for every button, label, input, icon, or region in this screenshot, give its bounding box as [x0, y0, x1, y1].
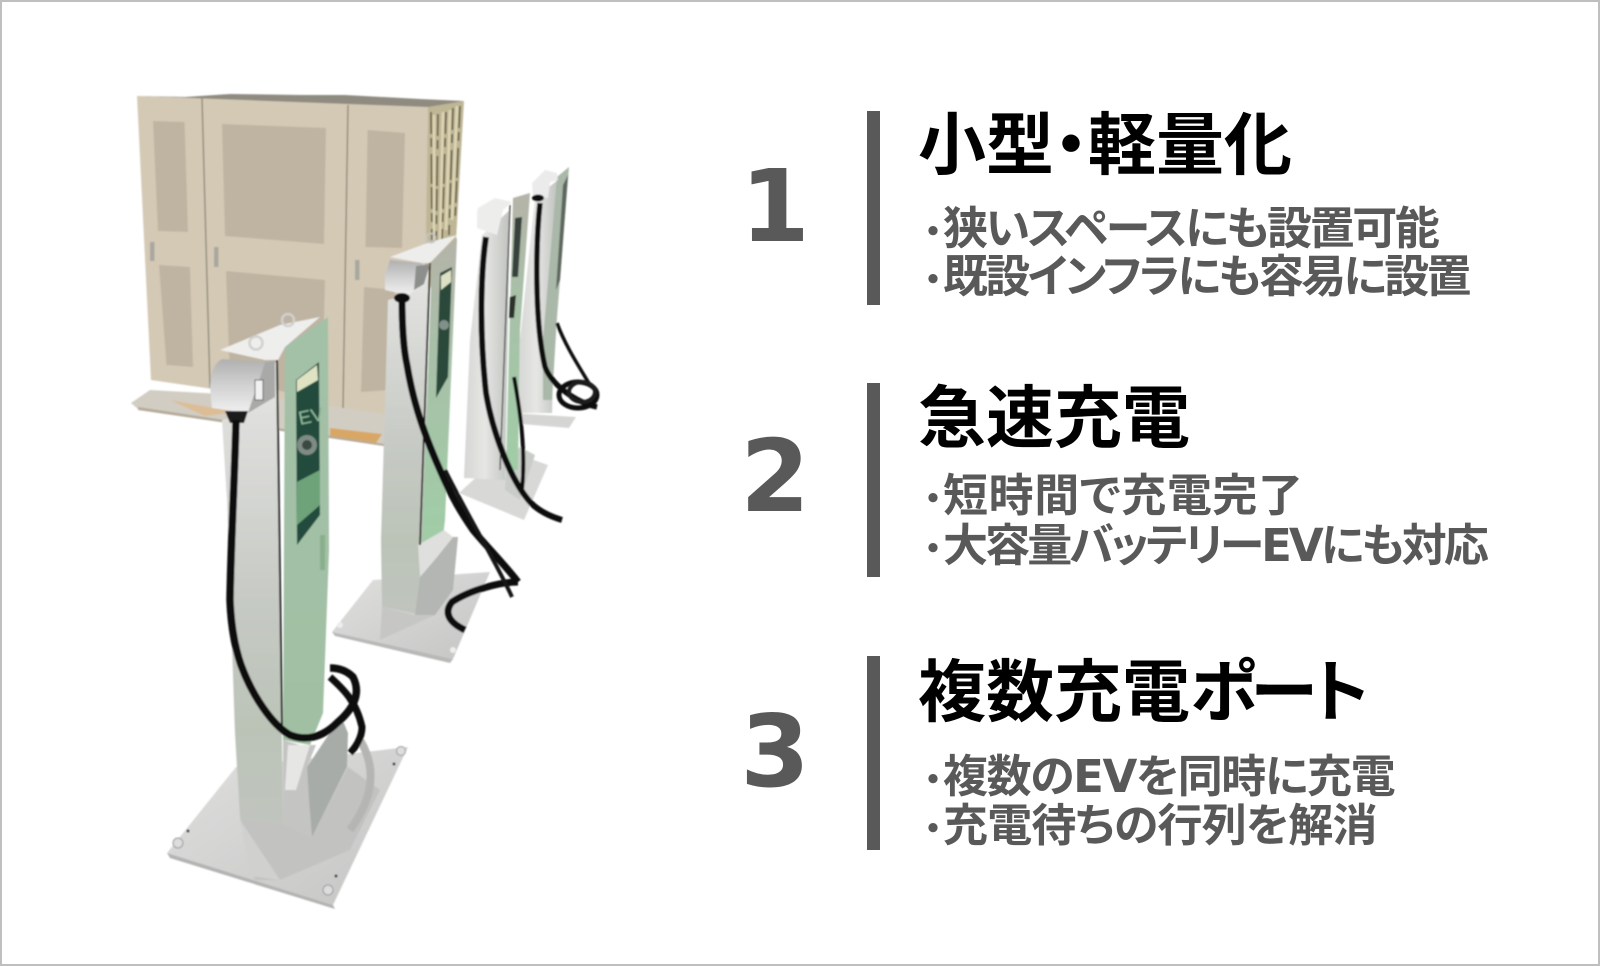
cable [225, 411, 248, 423]
bullet 1-1: ・ [915, 212, 951, 253]
charger post 1 (front) [167, 314, 408, 909]
screen [296, 362, 326, 545]
bullet 3-2: ・ [915, 809, 951, 850]
battery cabinet [137, 94, 464, 420]
section 1: compact and lightweight [740, 90, 1470, 305]
column [222, 360, 283, 823]
section 2: fast charging [740, 363, 1488, 577]
cabinet base plate [131, 390, 420, 446]
number 3: 3 [740, 693, 810, 810]
divider bar 3 [867, 656, 880, 850]
bullet 1-1: 狭いスペースにも設置可能 [943, 202, 1437, 255]
number 1: 1 [740, 148, 810, 265]
divider bar 2 [867, 383, 880, 577]
charger post 2 [332, 234, 518, 663]
divider bar 1 [867, 111, 880, 305]
charger post 4 (rear) [509, 167, 597, 428]
charger post 3 [459, 193, 562, 520]
bullet 1-2: ・ [915, 260, 951, 301]
screen: EV [297, 404, 326, 430]
bullet 2-1: 短時間で充電完了 [943, 469, 1304, 522]
heading 3: 複数充電ポート [918, 637, 1364, 736]
bullet 2-2: ・ [915, 529, 951, 570]
bullet 1-2: 既設インフラにも容易に設置 [943, 250, 1469, 303]
number 2: 2 [740, 418, 810, 535]
bullet 2-1: ・ [915, 479, 951, 520]
front bracket [283, 740, 316, 837]
heading 1: 小型・軽量化 [918, 90, 1292, 189]
head housing [220, 317, 320, 360]
bullet 3-1: 複数のEVを同時に充電 [943, 750, 1394, 803]
section 3: multiple charging ports [740, 637, 1394, 852]
bullet 3-2: 充電待ちの行列を解消 [943, 799, 1377, 852]
bullet 3-1: ・ [915, 760, 951, 801]
cabinet mesh windows [153, 121, 405, 400]
bullet 2-2: 大容量バッテリーEVにも対応 [943, 519, 1486, 572]
heading 2: 急速充電 [918, 363, 1190, 462]
base plate [167, 747, 408, 905]
